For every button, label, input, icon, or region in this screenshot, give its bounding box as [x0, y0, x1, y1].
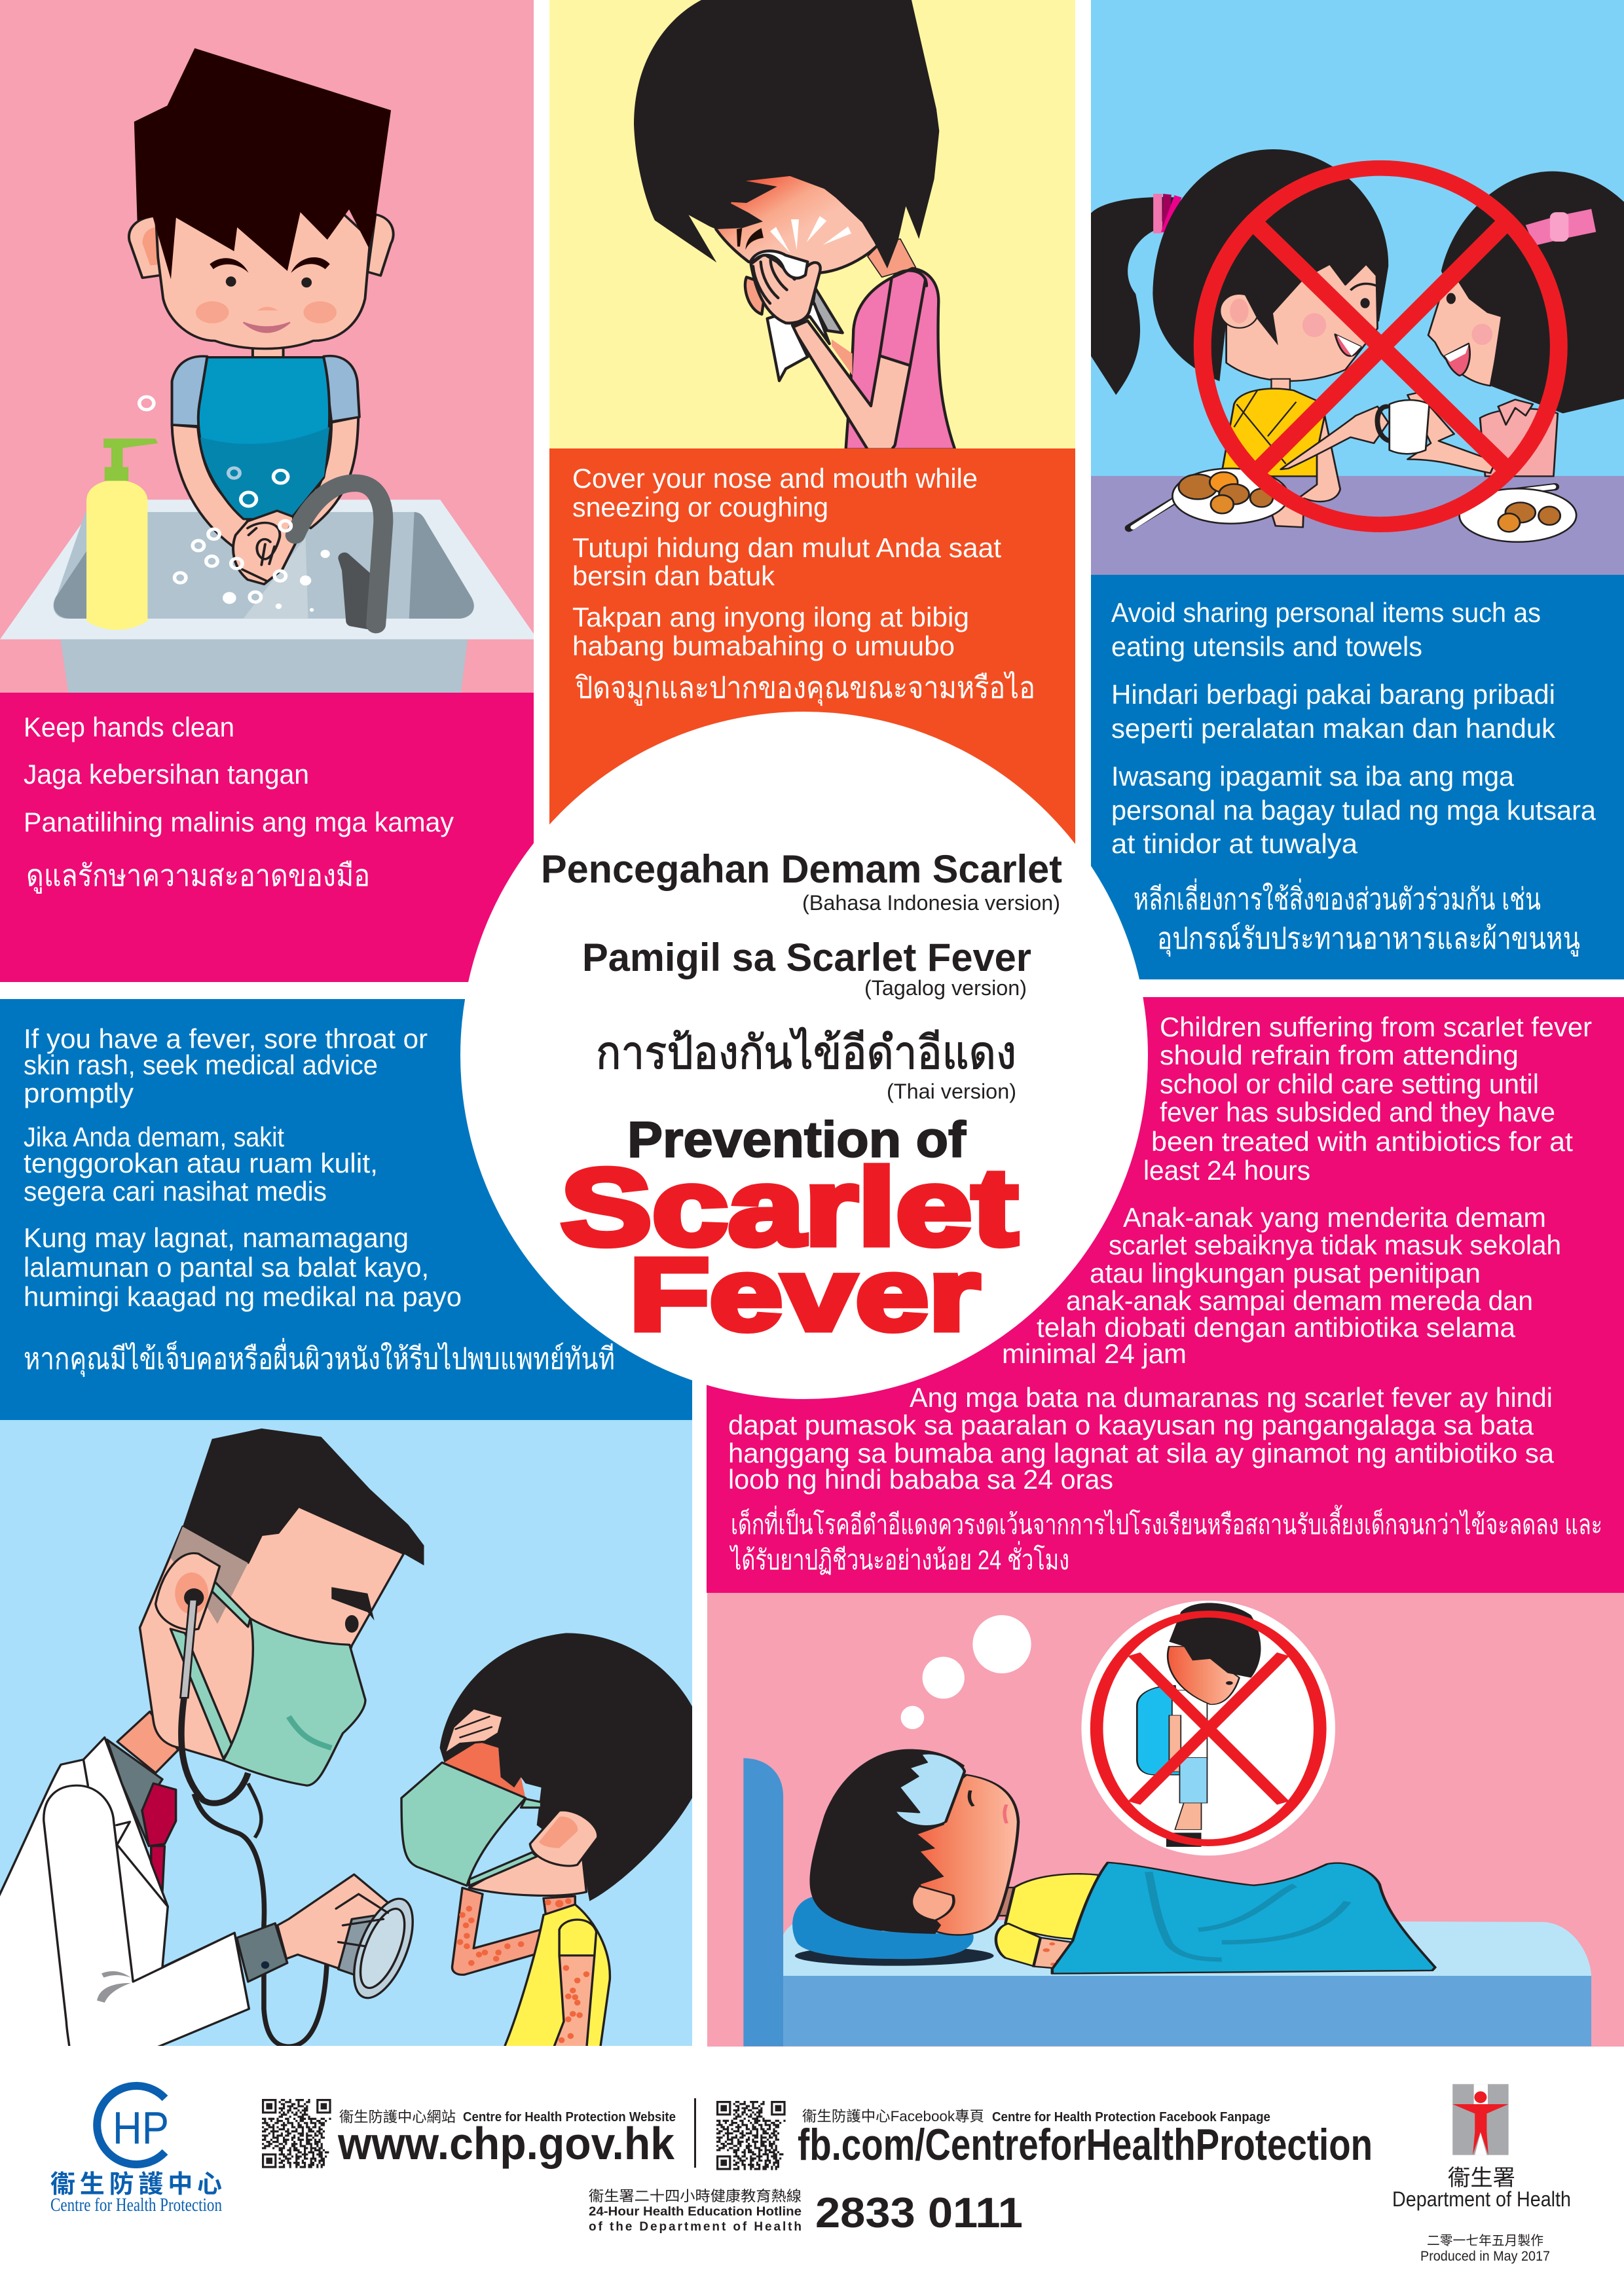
panel: keep hands clean text: Keep hands clean [24, 712, 234, 742]
panel: seek medical advice text: skin rash, seek medical advice [24, 1049, 378, 1080]
panel: school exclusion paragraphs: least 24 hours [1143, 1155, 1310, 1186]
panel: school exclusion paragraphs: Anak-anak yang menderita demam [1123, 1202, 1546, 1233]
thought bubbles [901, 1615, 1031, 1729]
CHP letters: HP [113, 2102, 169, 2153]
panel: cover nose and mouth illustration [549, 0, 1075, 450]
website url: www.chp.gov.hk [337, 2118, 674, 2169]
Facebook label: Centre for Health Protection Facebook Fanpage [992, 2110, 1270, 2124]
panel: avoid sharing text: at tinidor at tuwalya [1111, 828, 1358, 859]
panel: school exclusion paragraphs: minimal 24 jam [1002, 1338, 1187, 1369]
panel: keep hands clean illustration [0, 0, 538, 693]
panel: seek medical advice text: lalamunan o pantal sa balat kayo, [24, 1252, 429, 1283]
red prohibition sign [1202, 168, 1559, 524]
child arm with rash [452, 1887, 542, 1975]
panel: cover nose and mouth text: sneezing or coughing [572, 492, 828, 522]
panel: seek medical advice text: humingi kaagad ng medikal na payo [24, 1281, 462, 1312]
panel: cover nose and mouth text: bersin dan batuk [572, 560, 775, 591]
hand back [745, 277, 766, 314]
plates of food [1129, 469, 1576, 542]
Facebook label: 衞生防護中心Facebook專頁 [802, 2108, 984, 2124]
DH English name: Department of Health [1392, 2187, 1571, 2211]
panel: school exclusion paragraphs: been treated with antibiotics for at [1151, 1126, 1573, 1157]
doctor hand and cuff [237, 1874, 425, 2005]
Fever: Fever [629, 1238, 980, 1352]
bed [743, 1758, 1591, 2047]
panel: school exclusion paragraphs [728, 1011, 1602, 1575]
central white circle [460, 712, 1148, 1399]
panel: cover nose and mouth text: Tutupi hidung dan mulut Anda saat [572, 532, 1001, 563]
Scarlet: Scarlet [561, 1147, 1018, 1268]
pillow [792, 1897, 994, 1966]
panel: cover nose and mouth text: habang bumabahing o umuubo [572, 630, 955, 661]
panel: seek medical advice text: Kung may lagnat, namamagang [24, 1222, 409, 1253]
sink [0, 500, 538, 693]
panel: school exclusion paragraphs: telah diobati dengan antibiotika selama [1037, 1312, 1516, 1343]
panel: keep hands clean text [0, 693, 534, 982]
panel: cover nose and mouth text: ปิดจมูกและปากของคุณขณะจามหรือไอ [575, 670, 1035, 706]
girl with ponytail [1086, 149, 1388, 527]
panel: stay at home illustration [707, 1593, 1624, 2047]
Facebook label [802, 2108, 1270, 2124]
website label: Centre for Health Protection Website [463, 2110, 676, 2124]
hotline label [589, 2188, 802, 2234]
English title: Prevention of [627, 1112, 966, 1168]
child head and mask [401, 1633, 706, 1901]
Thai title: การป้องกันไข้อีดำอีแดง [596, 1027, 1016, 1078]
panel: avoid sharing text [1091, 575, 1624, 979]
panel: keep hands clean text: Panatilihing malinis ang mga kamay [24, 807, 454, 837]
panel: keep hands clean text: Jaga kebersihan tangan [24, 759, 309, 790]
Facebook QR code [716, 2101, 786, 2170]
CHP English name: Centre for Health Protection [50, 2195, 222, 2215]
Indonesian title: Pencegahan Demam Scarlet [541, 847, 1062, 891]
production date: 二零一七年五月製作 [1427, 2233, 1543, 2248]
panel: cover nose and mouth text: Cover your nose and mouth while [572, 463, 978, 494]
website label: 衞生防護中心網站 [339, 2109, 456, 2125]
panel: avoid sharing text: seperti peralatan makan dan handuk [1111, 713, 1556, 744]
hotline label: 24-Hour Health Education Hotline [589, 2205, 802, 2219]
cup [1377, 400, 1430, 454]
website QR code [262, 2099, 331, 2168]
Facebook url: fb.com/CentreforHealthProtection [798, 2120, 1373, 2170]
production date: Produced in May 2017 [1420, 2249, 1550, 2264]
panel: cover nose and mouth text: Takpan ang inyong ilong at bibig [572, 602, 969, 632]
faucet [295, 483, 383, 625]
hands [233, 511, 296, 584]
no school sign [1081, 1601, 1335, 1855]
sneeze rays [770, 216, 851, 253]
panel: school exclusion paragraphs: ได้รับยาปฏิชีวนะอย่างน้อย 24 ชั่วโมง [729, 1541, 1069, 1575]
panel: seek medical advice text: segera cari nasihat medis [24, 1176, 327, 1207]
Tagalog version note: (Tagalog version) [864, 976, 1027, 1000]
panel: avoid sharing text: Avoid sharing personal items such as [1111, 597, 1541, 628]
DH emblem [1452, 2084, 1509, 2155]
Indonesian version note: (Bahasa Indonesia version) [802, 891, 1060, 915]
panel: seek medical advice text: If you have a fever, sore throat or [24, 1023, 428, 1054]
blanket [1052, 1863, 1435, 1974]
CHP C ring [97, 2086, 165, 2164]
face [716, 175, 881, 273]
panel: avoid sharing text: eating utensils and towels [1111, 631, 1422, 662]
CHP Chinese name: 衞生防護中心 [50, 2171, 222, 2198]
panel: seek medical advice text [0, 999, 692, 1420]
doctor coat [0, 1738, 249, 2050]
hotline label: 衞生署二十四小時健康教育熱線 [589, 2188, 802, 2204]
logo: Department of Health [1392, 2084, 1571, 2211]
panel: school exclusion paragraphs: anak-anak sampai demam mereda dan [1066, 1285, 1533, 1316]
panel: school exclusion text [707, 997, 1624, 1593]
closed eye [737, 228, 742, 247]
girl neck [868, 239, 915, 277]
child body [503, 1896, 610, 2050]
panel: seek medical advice text: promptly [24, 1078, 134, 1108]
panel: school exclusion paragraphs: should refrain from attending [1160, 1040, 1519, 1070]
sick child head [809, 1749, 1018, 1935]
Tagalog title: Pamigil sa Scarlet Fever [582, 936, 1031, 979]
panel: school exclusion paragraphs: loob ng hindi bababa sa 24 oras [728, 1464, 1113, 1495]
panel: school exclusion paragraphs: school or child care setting until [1160, 1068, 1539, 1099]
panel: school exclusion paragraphs: Ang mga bata na dumaranas ng scarlet fever ay hindi [910, 1382, 1553, 1413]
stethoscope [181, 1588, 327, 2047]
panel: school exclusion paragraphs: Children suffering from scarlet fever [1160, 1011, 1592, 1042]
panel: avoid sharing text: personal na bagay tulad ng mga kutsara [1111, 795, 1596, 826]
soap bubbles [139, 397, 330, 611]
title block [541, 847, 1062, 1352]
panel: avoid sharing illustration [1086, 0, 1624, 575]
panel: school exclusion paragraphs: atau lingkungan pusat penitipan [1090, 1258, 1481, 1288]
panel: school exclusion paragraphs: scarlet sebaiknya tidak masuk sekolah [1109, 1230, 1561, 1260]
doctor head [140, 1429, 424, 1785]
arm [792, 321, 910, 450]
panel: school exclusion paragraphs: dapat pumasok sa paaralan o kaayusan ng pangangalaga sa bata [728, 1410, 1534, 1440]
hotline number: 2833 0111 [815, 2189, 1023, 2236]
tissue box and tissue [813, 288, 843, 333]
Thai version note: (Thai version) [887, 1080, 1016, 1103]
logo: Centre for Health Protection [50, 2086, 222, 2215]
panel: doctor illustration [0, 1420, 706, 2050]
panel: seek medical advice text: tenggorokan atau ruam kulit, [24, 1148, 378, 1178]
doctor mask [223, 1618, 365, 1785]
panel: school exclusion paragraphs: hanggang sa bumaba ang lagnat at sila ay ginamot ng antibiotiko sa [728, 1438, 1555, 1468]
website label [339, 2109, 676, 2125]
girl with bow [1407, 172, 1624, 476]
panel: avoid sharing text: Hindari berbagi pakai barang pribadi [1111, 679, 1555, 710]
panel: keep hands clean text: ดูแลรักษาความสะอาดของมือ [26, 858, 370, 894]
panel: seek medical advice text: Jika Anda demam, sakit [24, 1121, 284, 1152]
boy neck and body [172, 344, 360, 547]
panel: cover nose and mouth text [549, 448, 1075, 854]
soap bottle [86, 439, 158, 630]
hand with tissue [751, 254, 821, 323]
DH Chinese name: 衞生署 [1448, 2166, 1515, 2191]
panel: seek medical advice text: หากคุณมีไข้เจ็บคอหรือผื่นผิวหนังให้รีบไปพบแพทย์ทันที [24, 1338, 615, 1377]
panel: school exclusion paragraphs: fever has subsided and they have [1160, 1097, 1555, 1127]
doctor neck [117, 1711, 178, 1773]
boy head [129, 48, 394, 349]
hair [634, 0, 939, 268]
production date [1420, 2233, 1550, 2264]
sick child body [996, 1874, 1099, 1969]
hotline label: of the Department of Health [589, 2220, 802, 2234]
panel: avoid sharing text: Iwasang ipagamit sa iba ang mga [1111, 761, 1515, 792]
girl shirt [846, 268, 955, 450]
